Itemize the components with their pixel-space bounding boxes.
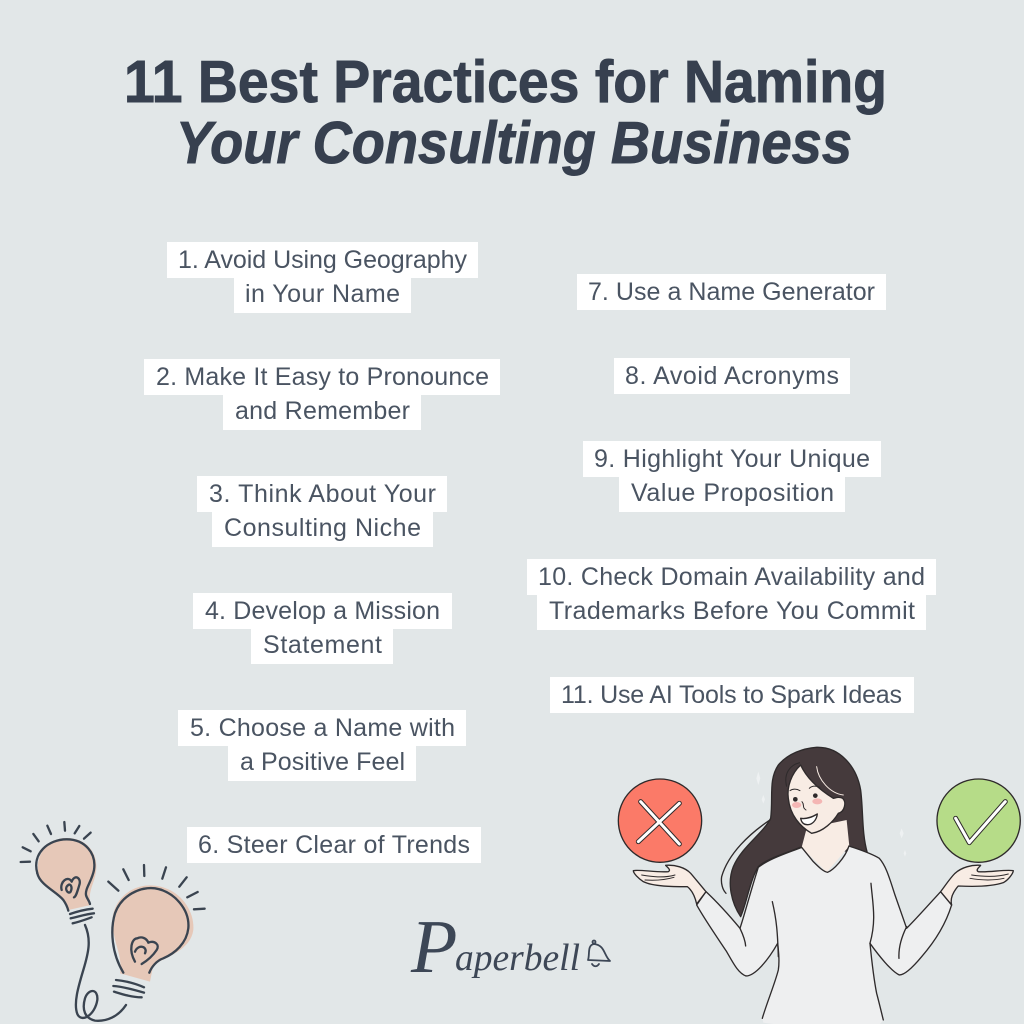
left hand bbox=[633, 865, 706, 904]
item 10 bbox=[527, 559, 936, 630]
item 2: and Remember bbox=[235, 397, 410, 425]
item 5: 5. Choose a Name with bbox=[190, 714, 455, 742]
icon: bell bbox=[588, 940, 610, 966]
item 4: 4. Develop a Mission bbox=[205, 597, 440, 625]
logo: Paperbell bbox=[410, 905, 610, 989]
item 9: Value Proposition bbox=[631, 479, 834, 507]
title: Your Consulting Business bbox=[176, 110, 852, 176]
icon: red cross badge bbox=[618, 779, 702, 862]
item 3 bbox=[197, 476, 447, 547]
illustration: woman weighing options bbox=[618, 747, 1020, 1024]
sweater bbox=[697, 846, 952, 1024]
item 1 bbox=[167, 242, 478, 313]
neck and face bbox=[786, 763, 849, 872]
sparkles bbox=[756, 772, 906, 857]
item 5 bbox=[178, 710, 466, 781]
item 5: a Positive Feel bbox=[240, 748, 405, 776]
item 4: Statement bbox=[263, 631, 382, 659]
item 3: Consulting Niche bbox=[224, 514, 421, 542]
logo: Paperbell: aperbell bbox=[455, 937, 580, 979]
logo: Paperbell: P bbox=[410, 905, 457, 989]
hair bbox=[721, 747, 867, 917]
item 4 bbox=[193, 593, 452, 664]
item 10: Trademarks Before You Commit bbox=[549, 597, 915, 625]
item 9: 9. Highlight Your Unique bbox=[594, 445, 870, 473]
item 1: in Your Name bbox=[245, 280, 400, 308]
icon: green check badge bbox=[937, 779, 1020, 862]
item 2 bbox=[144, 359, 500, 430]
right hand bbox=[941, 865, 1013, 905]
item 8: 8. Avoid Acronyms bbox=[625, 362, 839, 390]
panel: right column list bbox=[527, 274, 936, 713]
title bbox=[124, 49, 887, 176]
item 1: 1. Avoid Using Geography bbox=[178, 246, 468, 274]
item 7: 7. Use a Name Generator bbox=[588, 278, 875, 306]
item 11: 11. Use AI Tools to Spark Ideas bbox=[561, 681, 902, 709]
icon: light bulbs bbox=[21, 822, 205, 1021]
item 9 bbox=[583, 441, 881, 512]
panel: left column list bbox=[144, 242, 500, 863]
item 6: 6. Steer Clear of Trends bbox=[198, 831, 470, 859]
item 3: 3. Think About Your bbox=[209, 480, 436, 508]
title: 11 Best Practices for Naming bbox=[124, 49, 887, 115]
item 10: 10. Check Domain Availability and bbox=[538, 563, 925, 591]
item 2: 2. Make It Easy to Pronounce bbox=[156, 363, 489, 391]
